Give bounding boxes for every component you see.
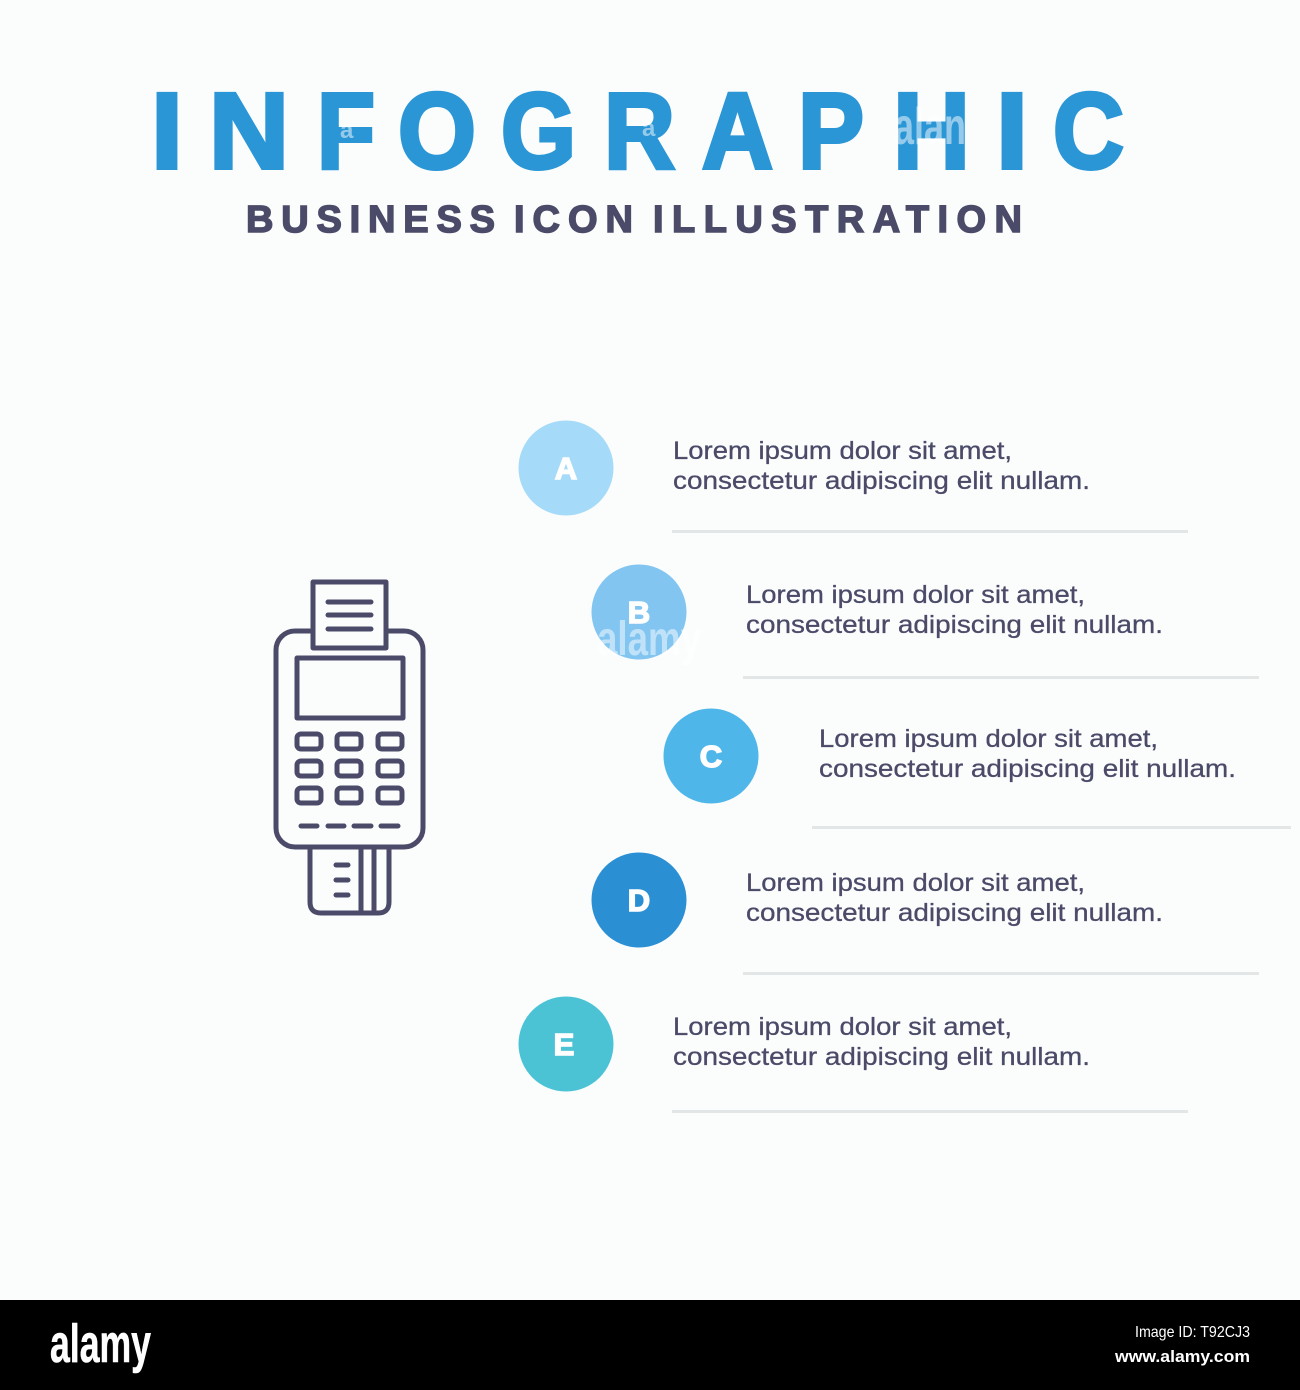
- watermark: a: [340, 117, 354, 144]
- letter B: B: [628, 595, 650, 630]
- letter A: A: [555, 451, 577, 486]
- terminal body: [276, 631, 423, 847]
- subtitle: [246, 199, 1022, 241]
- title: I: [996, 70, 1028, 191]
- step D: [592, 852, 1259, 975]
- receipt: [313, 582, 386, 648]
- text B: consectetur adipiscing elit nullam.: [746, 611, 1163, 639]
- letter D: D: [628, 883, 650, 918]
- text E: [673, 1013, 1090, 1071]
- text A: [673, 437, 1090, 495]
- text C: [819, 725, 1236, 783]
- footer bar: [0, 1300, 1300, 1390]
- keypad: [297, 734, 402, 803]
- letter C: C: [700, 739, 722, 774]
- step E: [518, 996, 1188, 1113]
- text C: Lorem ipsum dolor sit amet,: [819, 725, 1158, 753]
- subtitle: BUSINESS: [246, 199, 495, 241]
- website: www.alamy.com: [1114, 1347, 1250, 1366]
- step A: [518, 420, 1188, 533]
- watermark: a: [642, 115, 656, 142]
- credit card: [310, 847, 389, 913]
- text D: [746, 869, 1163, 927]
- text D: Lorem ipsum dolor sit amet,: [746, 869, 1085, 897]
- title: P: [798, 70, 864, 191]
- title: H: [893, 70, 970, 191]
- letter E: E: [554, 1027, 574, 1062]
- title: R: [604, 70, 675, 191]
- circle A: [518, 420, 614, 516]
- circle B: [592, 564, 686, 660]
- footer logo: alamy: [50, 1314, 151, 1374]
- circle C: [664, 708, 758, 804]
- step C: [664, 708, 1291, 829]
- watermark: alan: [894, 98, 966, 156]
- title: F: [317, 70, 375, 191]
- image id: Image ID: T92CJ3: [1135, 1324, 1250, 1341]
- title: C: [1053, 70, 1124, 191]
- title: G: [501, 70, 576, 191]
- watermark: alamy: [597, 613, 701, 666]
- text C: consectetur adipiscing elit nullam.: [819, 755, 1236, 783]
- text E: consectetur adipiscing elit nullam.: [673, 1043, 1090, 1071]
- text B: [746, 581, 1163, 639]
- icon: card payment terminal: [276, 582, 423, 913]
- subtitle: ICON: [514, 199, 633, 241]
- title: [151, 70, 1124, 191]
- subtitle: ILLUSTRATION: [653, 199, 1022, 241]
- circle E: [518, 996, 614, 1092]
- text D: consectetur adipiscing elit nullam.: [746, 899, 1163, 927]
- screen: [297, 658, 403, 718]
- title: O: [398, 70, 476, 191]
- text B: Lorem ipsum dolor sit amet,: [746, 581, 1085, 609]
- text E: Lorem ipsum dolor sit amet,: [673, 1013, 1012, 1041]
- text A: consectetur adipiscing elit nullam.: [673, 467, 1090, 495]
- title: A: [702, 70, 773, 191]
- text A: Lorem ipsum dolor sit amet,: [673, 437, 1012, 465]
- watermark: [340, 98, 966, 666]
- title: N: [209, 70, 289, 191]
- circle D: [592, 852, 686, 948]
- card slot dashes: [301, 824, 398, 828]
- title: I: [151, 70, 183, 191]
- step B: [592, 564, 1259, 679]
